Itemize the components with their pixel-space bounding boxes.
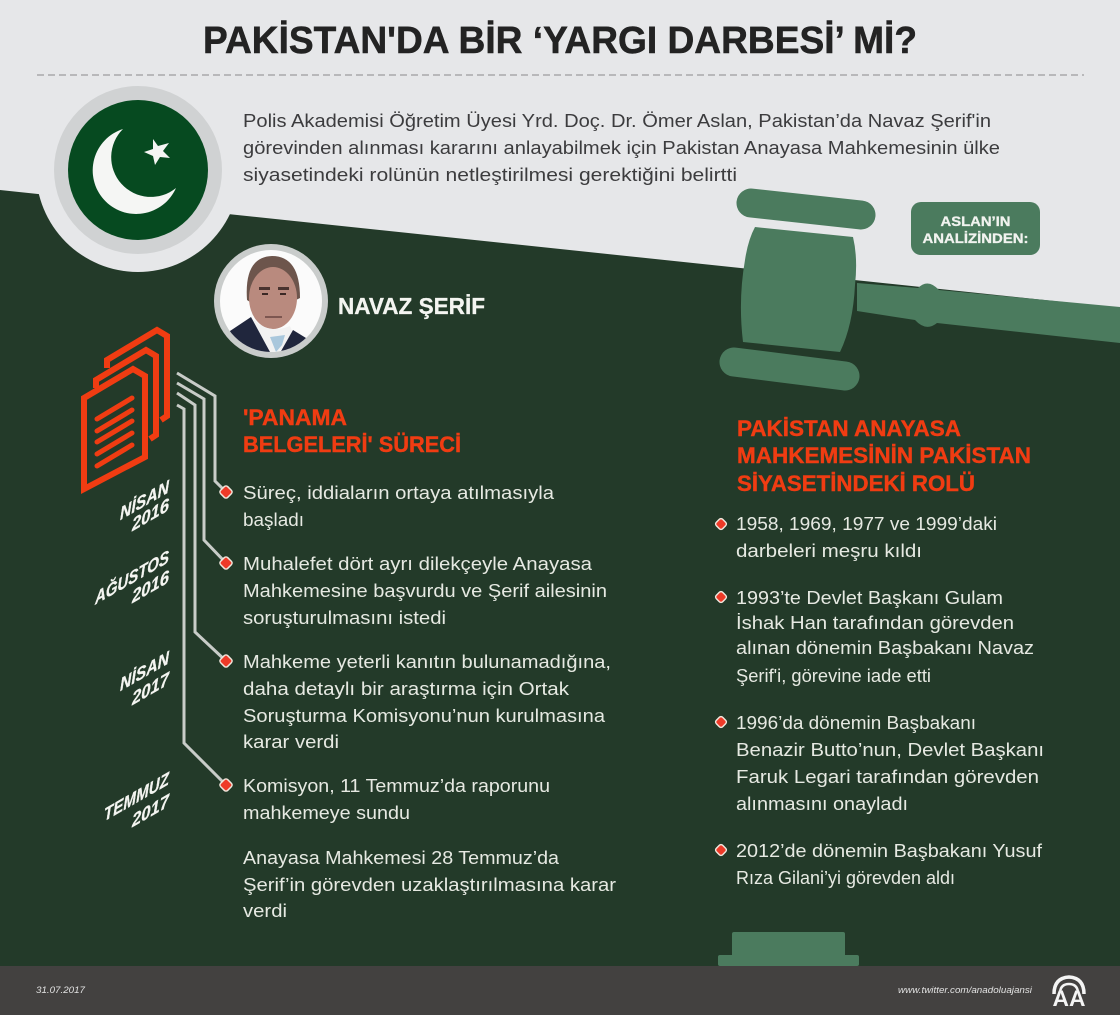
right column text: Rıza Gilani’yi görevden aldı — [736, 867, 955, 888]
right column text: 1958, 1969, 1977 ve 1999’daki — [736, 513, 997, 534]
right column text: İshak Han tarafından görevden — [736, 612, 1014, 633]
right column text: alınan dönemin Başbakanı Navaz — [736, 637, 1034, 658]
intro text — [243, 110, 1000, 185]
timeline text: Soruşturma Komisyonu’nun kurulmasına — [243, 705, 606, 726]
timeline text: Şerif’in görevden uzaklaştırılmasına karar — [243, 874, 616, 895]
footer bar — [0, 966, 1120, 1015]
date: Nisan 2016: 2016 — [131, 494, 169, 536]
icon: Pakistan flag badge — [36, 68, 240, 272]
intro text: siyasetindeki rolünün netleştirilmesi gerektiğini belirtti — [243, 164, 737, 185]
heading: Constitutional Court role — [737, 416, 1031, 496]
timeline text — [243, 482, 616, 921]
right column text: Şerif'i, görevine iade etti — [736, 665, 931, 686]
right column text: 1993’te Devlet Başkanı Gulam — [736, 587, 1003, 608]
title: PAKİSTAN'DA BİR ‘YARGI DARBESİ’ Mİ? — [203, 20, 917, 62]
right column text: Faruk Legari tarafından görevden — [736, 766, 1039, 787]
callout: Aslan'ın analizinden — [911, 202, 1040, 255]
name label: NAVAZ ŞERİF — [338, 293, 485, 319]
date: Nisan 2017: NİSAN — [120, 646, 170, 696]
right column text: 1996’da dönemin Başbakanı — [736, 712, 976, 733]
timeline text: Mahkeme yeterli kanıtın bulunamadığına, — [243, 651, 611, 672]
intro text: görevinden alınması kararını anlayabilmek için Pakistan Anayasa Mahkemesinin ülke — [243, 137, 1000, 158]
timeline bullets — [219, 485, 233, 792]
icon: documents — [84, 330, 167, 489]
date: Temmuz 2017: 2017 — [131, 790, 170, 832]
date: Nisan 2016: NİSAN — [120, 475, 170, 525]
portrait: Navaz Şerif — [214, 244, 328, 360]
date: Nisan 2017 — [120, 646, 170, 710]
intro text: Polis Akademisi Öğretim Üyesi Yrd. Doç. Dr. Ömer Aslan, Pakistan’da Navaz Şerif'in — [243, 110, 991, 131]
date: Ağustos 2016: AĞUSTOS — [94, 544, 169, 610]
timeline text: Komisyon, 11 Temmuz’da raporunu — [243, 775, 550, 796]
heading: Constitutional Court role: PAKİSTAN ANAYASA — [737, 416, 961, 441]
callout: Aslan'ın analizinden: ASLAN’IN — [940, 214, 1010, 229]
timeline text: mahkemeye sundu — [243, 802, 410, 823]
timeline text: Mahkemesine başvurdu ve Şerif ailesinin — [243, 580, 607, 601]
right column text: 2012’de dönemin Başbakanı Yusuf — [736, 840, 1043, 861]
heading: Panama Belgeleri: 'PANAMA — [243, 405, 347, 430]
icon: gavel — [718, 203, 1120, 966]
heading: Panama Belgeleri — [243, 405, 461, 457]
date: Ağustos 2016: 2016 — [131, 566, 169, 608]
right column text: Benazir Butto’nun, Devlet Başkanı — [736, 739, 1044, 760]
date: Nisan 2017: 2017 — [131, 668, 170, 710]
timeline text: soruşturulmasını istedi — [243, 607, 446, 628]
right column bullets — [715, 518, 727, 856]
footer bar: 31.07.2017 — [36, 985, 86, 996]
timeline text: Süreç, iddiaların ortaya atılmasıyla — [243, 482, 555, 503]
heading: Panama Belgeleri: BELGELERİ' SÜRECİ — [243, 432, 461, 457]
right column text — [736, 513, 1044, 888]
timeline text: daha detaylı bir araştırma için Ortak — [243, 678, 570, 699]
callout: Aslan'ın analizinden: ANALİZİNDEN: — [922, 231, 1028, 246]
timeline text: verdi — [243, 900, 287, 921]
timeline connector lines — [177, 373, 226, 785]
heading: Constitutional Court role: MAHKEMESİNİN PAKİSTAN — [737, 443, 1031, 468]
right column text: darbeleri meşru kıldı — [736, 540, 922, 561]
icon: Anadolu Agency logo: AA — [1052, 986, 1086, 1011]
date: Temmuz 2017: TEMMUZ — [104, 768, 170, 826]
footer bar: www.twitter.com/anadoluajansi — [898, 985, 1033, 996]
timeline text: karar verdi — [243, 731, 339, 752]
heading: Constitutional Court role: SİYASETİNDEKİ ROLÜ — [737, 471, 975, 496]
right column text: alınmasını onayladı — [736, 793, 908, 814]
timeline text: Anayasa Mahkemesi 28 Temmuz’da — [243, 847, 560, 868]
timeline text: başladı — [243, 509, 304, 530]
timeline text: Muhalefet dört ayrı dilekçeyle Anayasa — [243, 553, 593, 574]
